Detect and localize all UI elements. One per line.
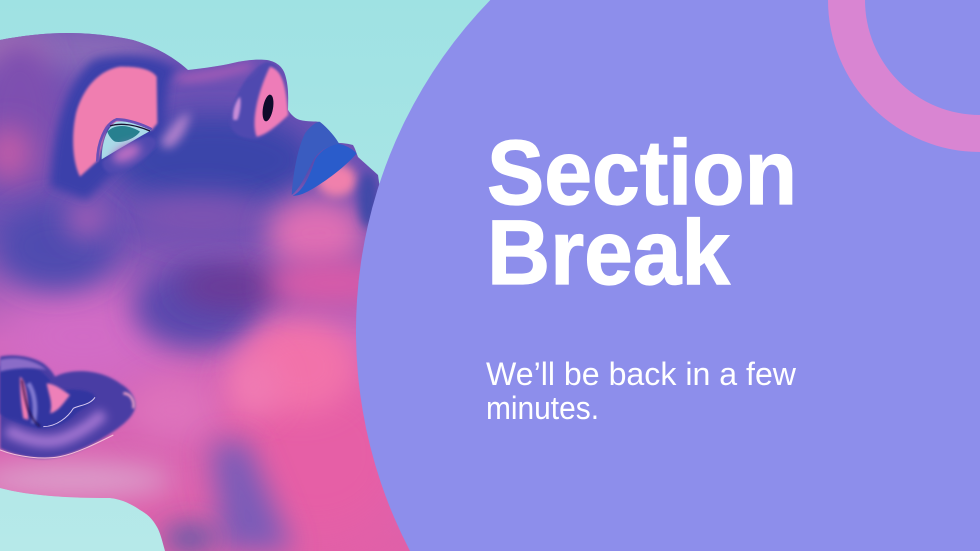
nose side — [230, 62, 288, 139]
title: Section — [487, 122, 797, 224]
panel: purple circle — [356, 0, 980, 551]
title — [487, 122, 797, 304]
brow ridge — [50, 55, 188, 200]
neck and jaw shading — [0, 263, 417, 551]
ear shading — [0, 355, 135, 458]
subtitle text — [486, 356, 797, 426]
ring accent — [828, 0, 980, 152]
image: metallic head in profile — [0, 33, 410, 551]
eye socket highlight — [73, 67, 157, 177]
icon: nostril — [261, 94, 275, 122]
subtitle text: minutes. — [486, 390, 599, 426]
icon: lips — [292, 122, 357, 196]
title: Break — [487, 202, 731, 304]
subtitle text: We’ll be back in a few — [486, 356, 797, 392]
cheek highlight — [160, 113, 190, 148]
face shading — [0, 27, 400, 307]
icon: eye — [97, 119, 156, 173]
